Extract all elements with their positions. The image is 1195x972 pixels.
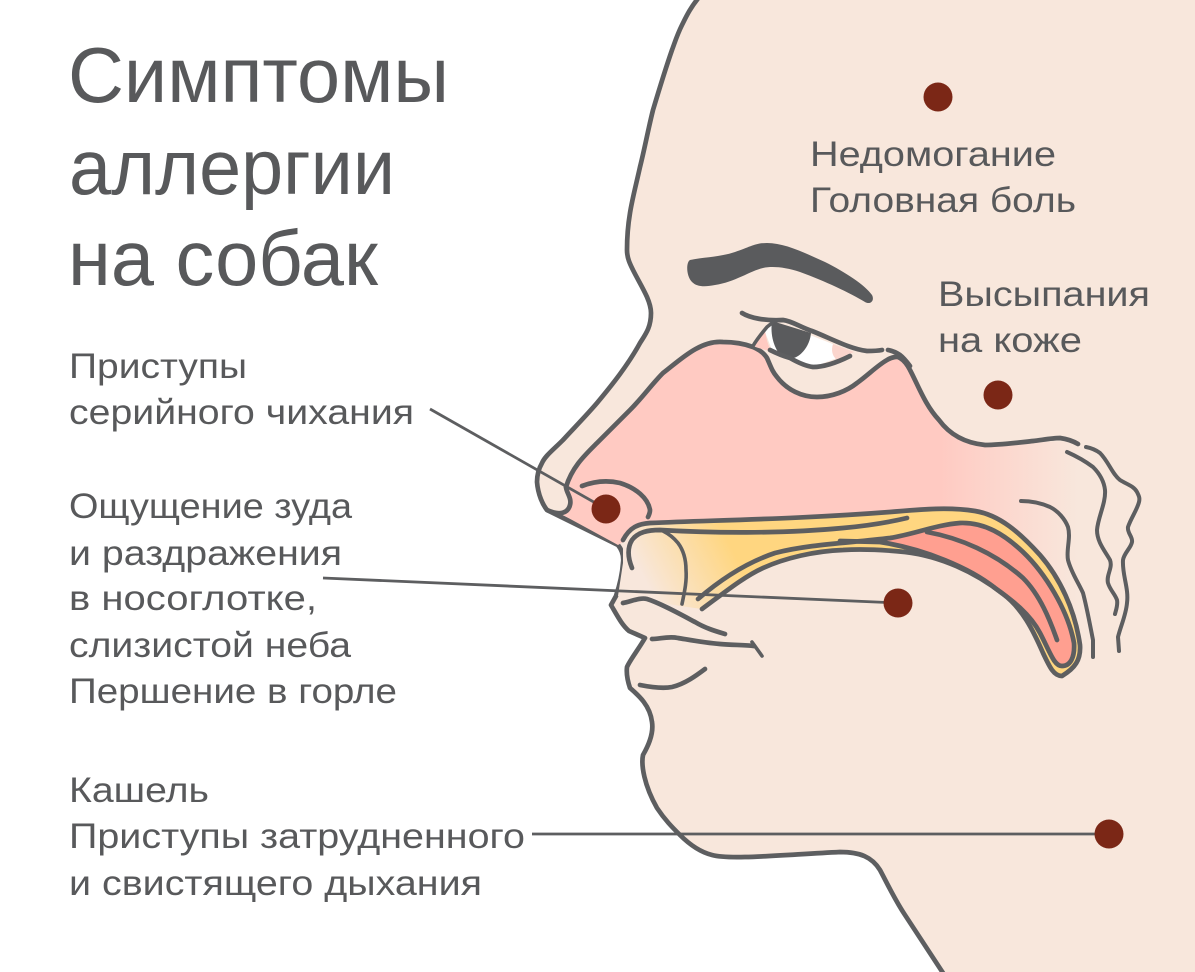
eyebrow xyxy=(687,243,873,303)
marker: nose xyxy=(592,494,620,524)
label: cough: и свистящего дыхания xyxy=(69,864,482,903)
label: itching: Ощущение зуда xyxy=(69,487,353,526)
throat contour lines xyxy=(1021,447,1139,657)
label: rash: Высыпания xyxy=(938,275,1150,314)
label: itching: слизистой неба xyxy=(69,626,352,665)
label: cough: Приступы затрудненного xyxy=(69,817,525,856)
label: rash xyxy=(938,275,1150,360)
lips xyxy=(623,599,762,688)
label: itching: и раздражения xyxy=(69,534,342,573)
pink inflamed nasal area xyxy=(547,342,1078,620)
title xyxy=(68,31,449,302)
marker: rash xyxy=(984,380,1012,410)
label: malaise: Недомогание xyxy=(810,135,1056,174)
marker: throat xyxy=(1094,820,1124,848)
nostril xyxy=(582,481,650,517)
label: rash: на коже xyxy=(938,321,1082,360)
title: Симптомы xyxy=(68,31,449,119)
label: malaise: Головная боль xyxy=(810,181,1076,220)
leader line: itching xyxy=(323,578,898,603)
label: sneezing: Приступы xyxy=(69,347,247,386)
palate and nasal passage xyxy=(618,509,1080,676)
marker: malaise xyxy=(924,82,952,112)
label: cough xyxy=(69,771,525,903)
label: malaise xyxy=(810,135,1076,220)
label: itching xyxy=(69,487,397,711)
title: аллергии xyxy=(69,123,395,211)
eye xyxy=(742,313,910,367)
label: sneezing: серийного чихания xyxy=(69,393,414,432)
label: itching: в носоглотке, xyxy=(69,579,317,618)
marker: palate xyxy=(884,588,912,618)
face silhouette xyxy=(537,0,1195,972)
title: на собак xyxy=(68,214,379,302)
leader line: cough xyxy=(532,833,1109,835)
label: cough: Кашель xyxy=(69,771,209,810)
label: itching: Першение в горле xyxy=(69,672,397,711)
leader line: sneezing xyxy=(430,409,606,509)
label: sneezing xyxy=(69,347,414,432)
